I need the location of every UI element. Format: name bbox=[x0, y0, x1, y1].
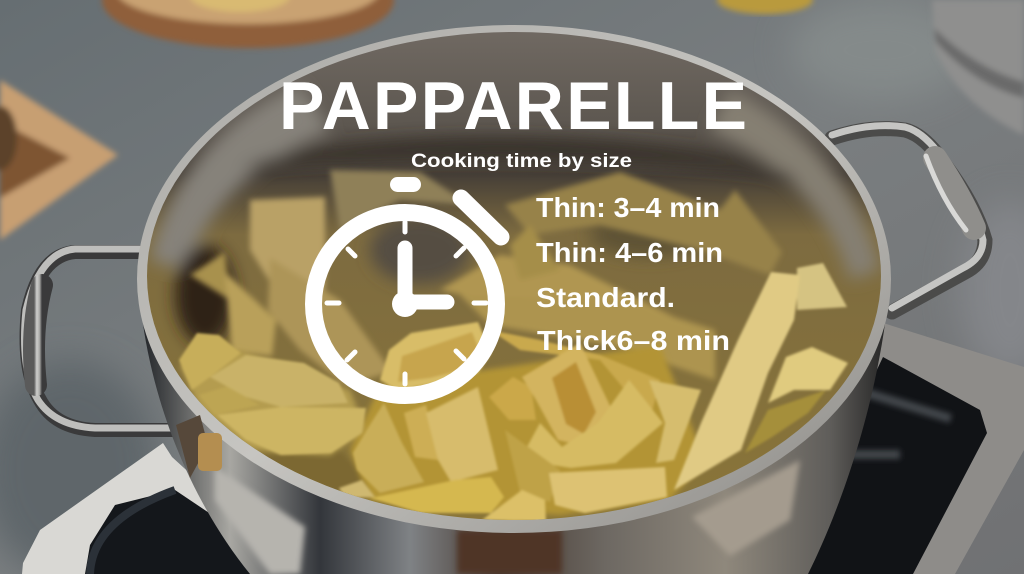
subtitle: Cooking time by size bbox=[411, 150, 632, 172]
pot interior bbox=[140, 25, 890, 525]
wooden board top bbox=[102, 0, 394, 48]
water and base below ribbons bbox=[180, 345, 705, 515]
steel kettle top right bbox=[932, 0, 1024, 135]
pot body reflections bbox=[215, 460, 800, 574]
pot body bbox=[140, 280, 890, 574]
row: thick 6-8 min: Thick6–8 min bbox=[537, 325, 730, 356]
wooden tray left bbox=[0, 80, 118, 240]
pot handle right bbox=[832, 126, 985, 312]
pot rim bbox=[137, 25, 891, 533]
pot handle left bbox=[24, 249, 180, 430]
pasta through water bbox=[190, 170, 782, 385]
time list bbox=[536, 192, 730, 356]
row: thin 3-4 min: Thin: 3–4 min bbox=[536, 192, 720, 223]
row: standard: Standard. bbox=[536, 282, 675, 313]
yellow item top bbox=[717, 0, 813, 14]
stove right bbox=[780, 322, 1024, 574]
pasta ribbons bbox=[179, 263, 848, 522]
row: thin 4-6 min: Thin: 4–6 min bbox=[536, 237, 723, 268]
interior reflections bbox=[150, 85, 880, 345]
pot brass rivet bbox=[176, 415, 222, 478]
title: PAPPARELLE bbox=[279, 68, 747, 144]
icon: stopwatch bbox=[314, 177, 501, 396]
stove left bbox=[22, 443, 300, 574]
